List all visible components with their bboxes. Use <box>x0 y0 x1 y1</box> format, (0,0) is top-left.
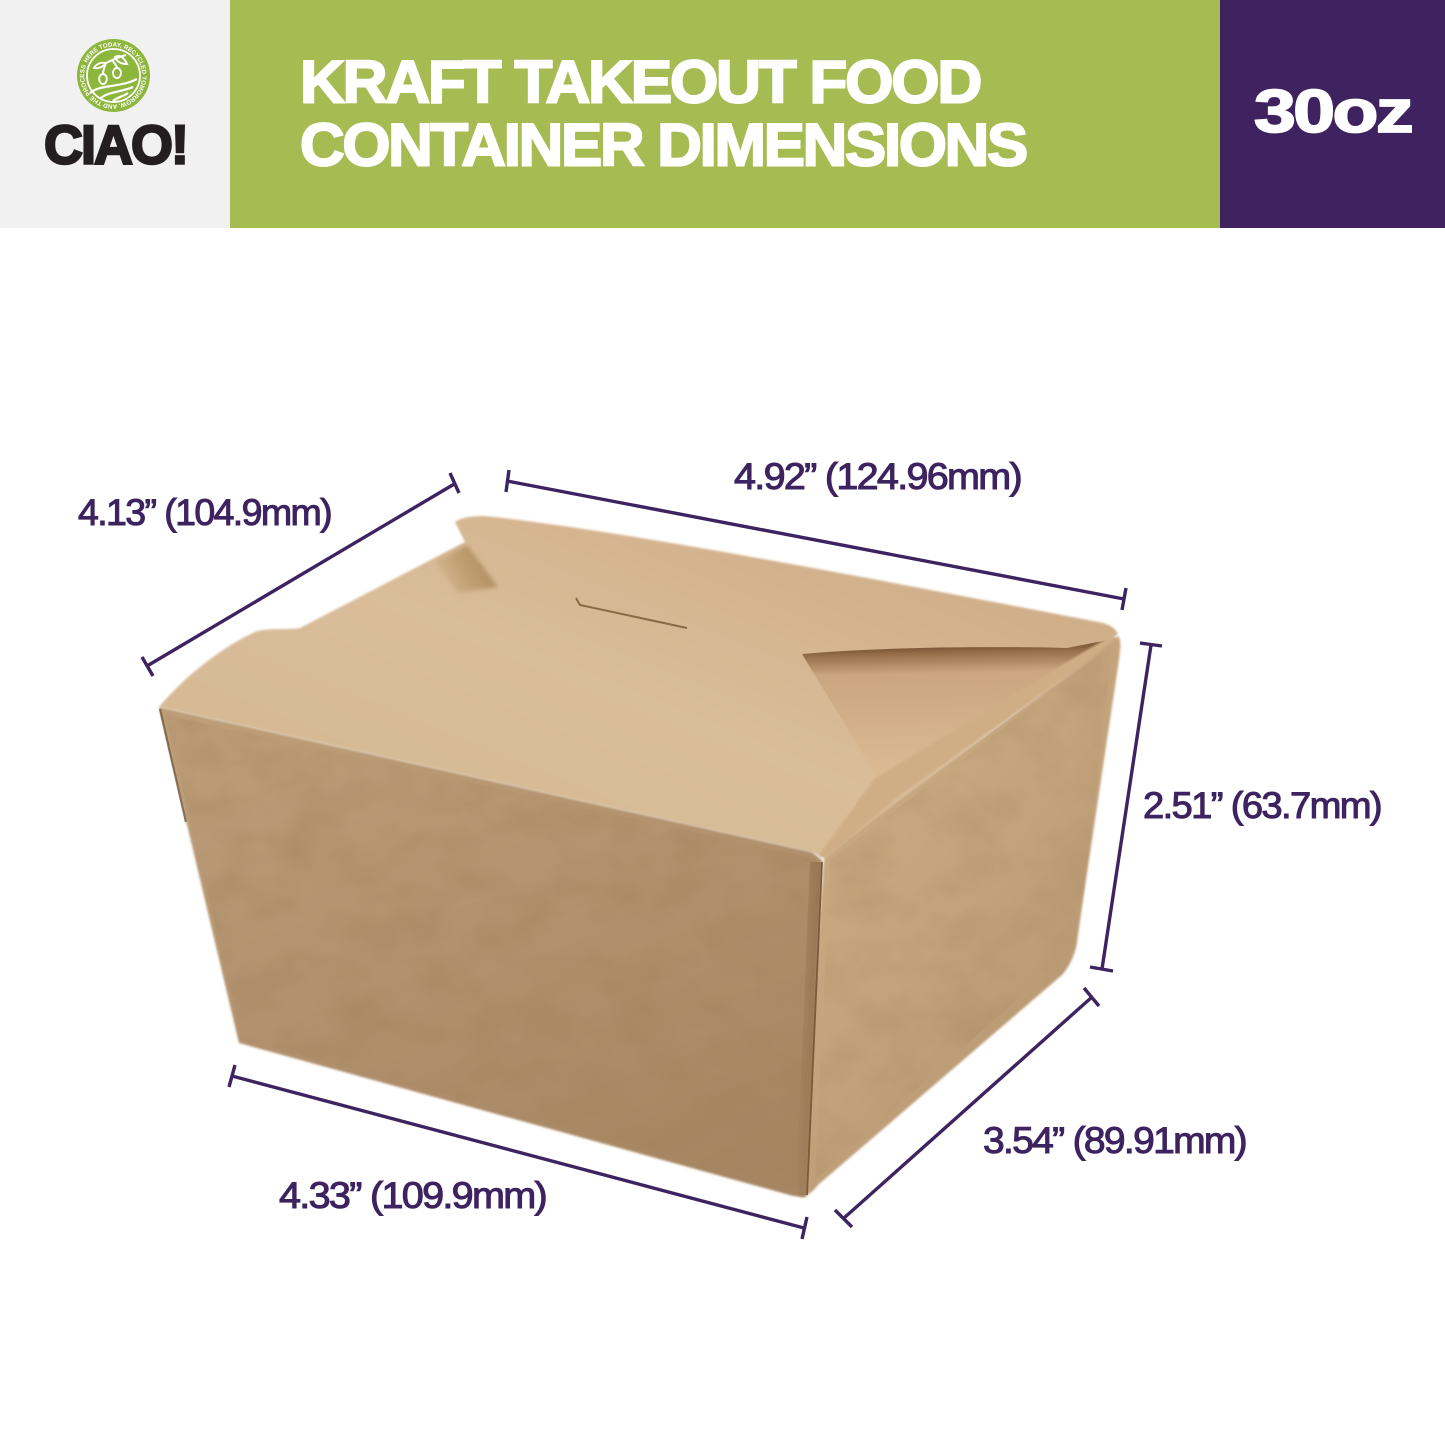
dimension label: 4.13: 4.13” (104.9mm) <box>78 492 331 533</box>
dimension label: 3.54: 3.54” (89.91mm) <box>983 1120 1246 1161</box>
dimension line: bottom depth <box>835 988 1099 1227</box>
box: left edge dark line <box>160 709 186 822</box>
dimension label: 2.51: 2.51” (63.7mm) <box>1143 785 1381 826</box>
dimension line: bottom length <box>229 1065 807 1239</box>
box: slot <box>576 598 687 628</box>
title: KRAFT TAKEOUT FOOD <box>300 48 980 116</box>
box: right face <box>800 636 1120 1197</box>
header panel: logo background <box>0 0 230 228</box>
icon: Ciao round olive badge <box>77 39 150 112</box>
dimension line: left depth <box>142 473 459 676</box>
header panel: capacity background <box>1220 0 1445 228</box>
dimension label: 4.33: 4.33” (109.9mm) <box>279 1175 546 1216</box>
box: front face mottled texture <box>165 715 816 1190</box>
box: right face mottled texture <box>815 645 1112 1180</box>
box: corner seam shadow <box>796 862 822 1195</box>
dimension line: height <box>1090 643 1162 971</box>
dimension line: top length <box>506 470 1126 610</box>
logo wordmark: CIAO! <box>44 114 187 176</box>
title: CONTAINER DIMENSIONS <box>300 112 1026 178</box>
title <box>300 48 1026 178</box>
box: flap fold line highlight <box>819 635 1118 858</box>
capacity label: 30oz <box>1254 78 1411 145</box>
box: top flaps <box>159 516 1118 858</box>
header panel: title background <box>230 0 1220 228</box>
box: front face <box>159 707 822 1197</box>
box: right notch interior <box>802 640 1108 779</box>
dimension label: 4.92: 4.92” (124.96mm) <box>734 456 1021 497</box>
box: corner seam <box>807 862 822 1195</box>
box: left notch shadow <box>435 545 498 593</box>
kraft takeout box illustration <box>159 516 1120 1197</box>
